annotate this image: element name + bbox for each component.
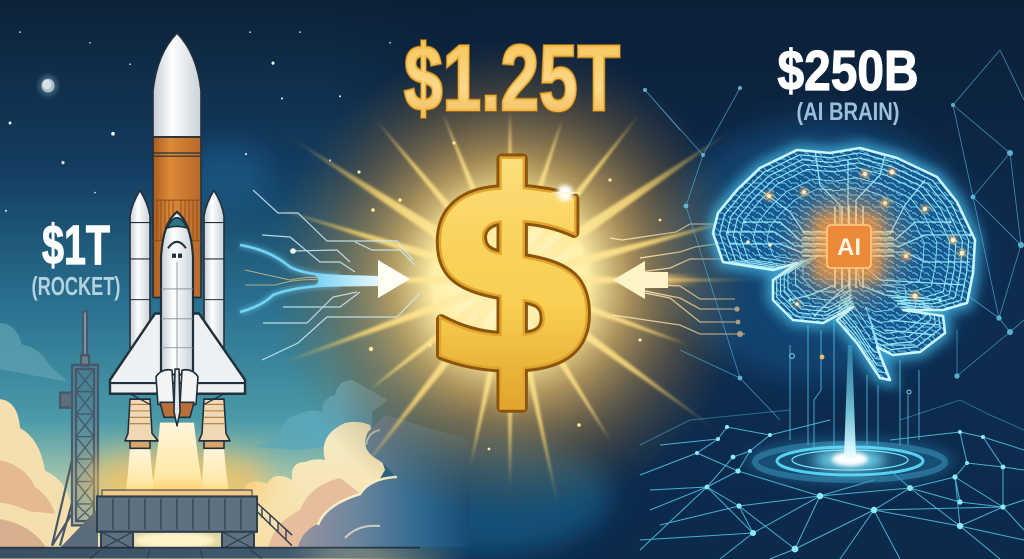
glint on dollar bbox=[548, 185, 582, 201]
left clouds bbox=[0, 323, 110, 559]
right network lines upper bbox=[643, 50, 1024, 420]
core stage bbox=[153, 33, 201, 297]
network floor bbox=[640, 400, 1024, 559]
label: $250B (AI brain): $250B bbox=[778, 39, 918, 103]
label: $250B (AI brain): (AI BRAIN) bbox=[796, 98, 900, 126]
shuttle bbox=[110, 212, 245, 426]
light beam and data lines bbox=[790, 320, 919, 458]
rocket and launch complex bbox=[0, 33, 440, 559]
label: $250B (AI brain) bbox=[778, 39, 918, 126]
dollar sign: $ bbox=[420, 114, 604, 432]
clouds right of rocket bbox=[245, 380, 470, 547]
dollar sign: $ bbox=[420, 114, 604, 432]
booster left bbox=[125, 190, 158, 448]
brain bbox=[700, 140, 990, 390]
holographic ring platform bbox=[745, 437, 955, 485]
AI chip: AI bbox=[837, 234, 861, 261]
circuit traces bbox=[714, 149, 974, 378]
pad bbox=[97, 490, 292, 549]
flames bbox=[82, 423, 272, 549]
brain glowing nodes bbox=[746, 168, 966, 307]
label: $1T (rocket) bbox=[32, 213, 120, 301]
label: $1T (rocket): $1T bbox=[42, 213, 110, 276]
title: $1.25T: $1.25T bbox=[404, 26, 620, 130]
ground bbox=[0, 547, 440, 559]
sunburst bbox=[269, 40, 760, 520]
right wires and arrow bbox=[610, 224, 745, 337]
AI chip bbox=[796, 194, 900, 298]
label: $1T (rocket): (ROCKET) bbox=[32, 271, 120, 301]
booster right bbox=[199, 190, 230, 448]
title: $1.25T: $1.25T bbox=[404, 26, 620, 130]
dollar sign: $ bbox=[420, 114, 604, 432]
stars and moon bbox=[5, 31, 391, 212]
left energy streams and arrow bbox=[240, 190, 420, 360]
dollar sign: $ bbox=[420, 114, 604, 432]
launch tower bbox=[52, 311, 98, 548]
